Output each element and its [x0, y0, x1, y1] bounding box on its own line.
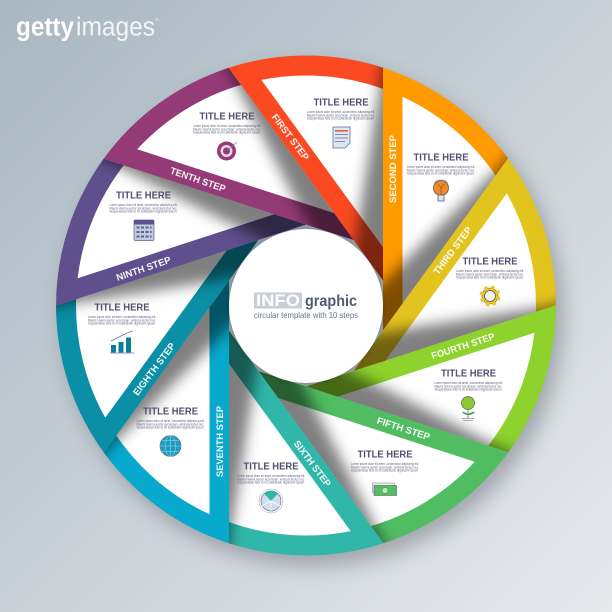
sixth step label: SIXTH STEP [291, 439, 333, 490]
fifth body text: Lorem ipsum dolor sit amet, consectetur adipiscing elit. [351, 462, 419, 466]
panel: fifth step [258, 371, 508, 543]
icon: calendar [134, 220, 154, 240]
seventh step wedge [104, 280, 229, 544]
eighth body text: Lorem ipsum dolor sit amet, consectetur adipiscing elit. [88, 315, 156, 319]
ninth step wedge [56, 158, 306, 306]
center circle shadow [228, 229, 384, 384]
second body text: Mauris viverra auctor accumsan, vehicula lectus nec. [407, 168, 475, 172]
first step wedge [228, 56, 383, 280]
eighth body text: Mauris viverra auctor accumsan, vehicula lectus nec. [88, 318, 156, 322]
panel: first step [228, 56, 383, 280]
fourth body text: Suspendisse felis id mi sollicitudin dignissim ipsum. [434, 388, 503, 392]
second body text: Lorem ipsum dolor sit amet, consectetur adipiscing elit. [407, 165, 475, 169]
third body text: Lorem ipsum dolor sit amet, consectetur adipiscing elit. [456, 269, 524, 273]
seventh body text [136, 419, 205, 430]
sixth title: TITLE HERE [244, 461, 298, 473]
ninth body text [110, 203, 178, 214]
fifth title: TITLE HERE [358, 449, 412, 461]
sixth body text: Mauris viverra auctor accumsan, vehicula lectus nec. [237, 477, 305, 481]
sixth body text: Suspendisse felis id mi sollicitudin dignissim ipsum. [237, 481, 305, 485]
subtitle: circular template with 10 steps [254, 310, 358, 320]
panel: sixth step [229, 330, 384, 556]
eighth step wedge [56, 240, 258, 452]
eighth title: TITLE HERE [94, 302, 150, 314]
tenth step wedge [104, 68, 354, 240]
icon: banknote [372, 483, 396, 496]
sixth step wedge [229, 330, 384, 556]
seventh step label: SEVENTH STEP [215, 405, 226, 477]
fifth step wedge [258, 371, 508, 543]
second body text: Suspendisse felis id mi sollicitudin dignissim ipsum. [407, 172, 475, 176]
third step label: THIRD STEP [432, 225, 475, 277]
fifth body text: Suspendisse felis id mi sollicitudin dignissim ipsum. [351, 469, 419, 473]
panel: second step [383, 68, 508, 330]
first body text: Mauris viverra auctor accumsan, vehicula lectus nec. [307, 113, 375, 117]
third title: TITLE HERE [462, 256, 518, 268]
seventh body text: Lorem ipsum dolor sit amet, consectetur adipiscing elit. [136, 419, 205, 423]
panel: seventh step [104, 280, 229, 544]
seventh body text: Suspendisse felis id mi sollicitudin dignissim ipsum. [136, 426, 205, 430]
panel: eighth step [56, 240, 258, 452]
getty logo: ® [156, 17, 158, 22]
fifth step label: FIFTH STEP [375, 416, 432, 443]
icon: document [333, 127, 350, 148]
icon: light bulb [434, 180, 448, 201]
first body text [307, 110, 375, 121]
fourth body text: Lorem ipsum dolor sit amet, consectetur adipiscing elit. [434, 381, 503, 385]
center circle [229, 229, 383, 383]
getty logo: images [76, 14, 155, 42]
tenth step label: TENTH STEP [168, 166, 227, 195]
fourth body text [434, 381, 503, 392]
fifth body text [351, 462, 419, 473]
getty logo: getty [16, 14, 75, 42]
seventh body text: Mauris viverra auctor accumsan, vehicula lectus nec. [136, 422, 205, 426]
first title: TITLE HERE [314, 97, 368, 109]
icon: bar chart [110, 331, 134, 353]
panel: tenth step [104, 68, 354, 240]
ninth body text: Suspendisse felis id mi sollicitudin dignissim ipsum. [110, 210, 178, 214]
icon: money plant [462, 396, 475, 420]
eighth step label: EIGHTH STEP [131, 341, 178, 398]
ninth title: TITLE HERE [116, 190, 171, 202]
eighth body text [88, 315, 156, 326]
first step label: FIRST STEP [269, 112, 311, 163]
third step wedge [354, 158, 556, 371]
icon: globe [160, 436, 181, 456]
wheel drop shadow [63, 66, 563, 566]
tenth body text: Lorem ipsum dolor sit amet, consectetur adipiscing elit. [193, 124, 261, 128]
ninth step label: NINTH STEP [115, 255, 173, 284]
icon: pie chart [259, 489, 283, 513]
second step label: SECOND STEP [388, 134, 399, 203]
panel: third step [354, 158, 556, 371]
first body text: Suspendisse felis id mi sollicitudin dignissim ipsum. [307, 117, 375, 121]
third body text [456, 269, 524, 280]
icon: gear [481, 287, 499, 305]
getty logo [16, 14, 158, 42]
tenth body text [193, 124, 261, 135]
second body text [407, 165, 475, 176]
first body text: Lorem ipsum dolor sit amet, consectetur adipiscing elit. [307, 110, 375, 114]
tenth body text: Mauris viverra auctor accumsan, vehicula lectus nec. [193, 127, 261, 131]
panel: ninth step [56, 158, 306, 306]
sixth body text: Lorem ipsum dolor sit amet, consectetur adipiscing elit. [237, 474, 305, 478]
eighth body text: Suspendisse felis id mi sollicitudin dignissim ipsum. [88, 322, 156, 326]
graphic word: graphic [305, 293, 357, 310]
second step wedge [383, 68, 508, 330]
third body text: Suspendisse felis id mi sollicitudin dignissim ipsum. [456, 276, 524, 280]
ninth body text: Lorem ipsum dolor sit amet, consectetur adipiscing elit. [110, 203, 178, 207]
fourth body text: Mauris viverra auctor accumsan, vehicula lectus nec. [434, 384, 503, 388]
third body text: Mauris viverra auctor accumsan, vehicula lectus nec. [456, 272, 524, 276]
second title: TITLE HERE [414, 152, 468, 164]
fifth body text: Mauris viverra auctor accumsan, vehicula lectus nec. [351, 465, 419, 469]
INFO box: INFO [256, 291, 300, 310]
sixth body text [237, 474, 305, 485]
fourth title: TITLE HERE [441, 368, 496, 380]
tenth body text: Suspendisse felis id mi sollicitudin dignissim ipsum. [193, 131, 261, 135]
fourth step label: FOURTH STEP [430, 331, 497, 362]
seventh title: TITLE HERE [143, 406, 198, 418]
icon: target [217, 142, 237, 160]
fourth step wedge [306, 305, 556, 452]
ninth body text: Mauris viverra auctor accumsan, vehicula lectus nec. [110, 206, 178, 210]
panel: fourth step [306, 305, 556, 452]
tenth title: TITLE HERE [200, 111, 254, 123]
